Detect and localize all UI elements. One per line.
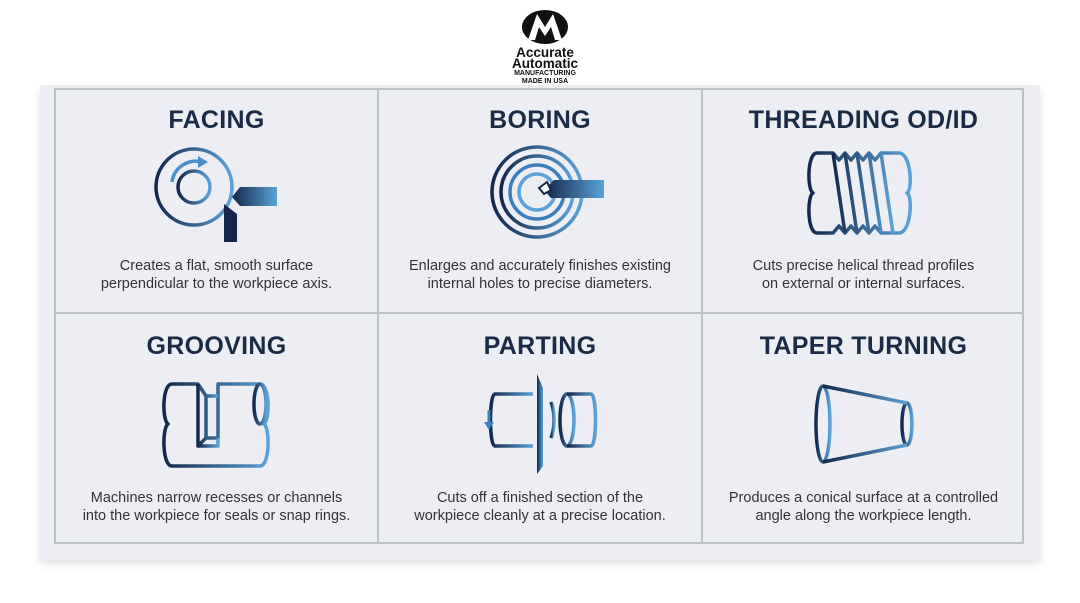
panel: boring: Enlarges and accurately finishes existing: [409, 258, 671, 274]
panel: taper turning: [729, 332, 998, 524]
panel: threading: THREADING OD/ID: [749, 106, 978, 134]
logo: MADE IN USA: [522, 78, 568, 85]
panel: parting: Cuts off a finished section of the: [437, 490, 643, 506]
panel: parting: workpiece cleanly at a precise location.: [414, 508, 666, 524]
logo: Automatic: [512, 56, 578, 71]
panel: boring: BORING: [489, 106, 591, 134]
panel: threading: Cuts precise helical thread profiles: [753, 258, 974, 274]
icon: parting: [484, 374, 598, 474]
panel: facing: Creates a flat, smooth surface: [120, 258, 313, 274]
panel: parting: PARTING: [484, 332, 596, 360]
icon: grooving: [162, 382, 270, 468]
panel: threading: on external or internal surfaces.: [762, 276, 965, 292]
panel: boring: [409, 106, 671, 292]
panel: taper turning: angle along the workpiece length.: [755, 508, 972, 524]
logo: [512, 10, 578, 85]
panel: taper turning: Produces a conical surface at a controlled: [729, 490, 998, 506]
panel: facing: FACING: [168, 106, 265, 134]
grid panel: [54, 88, 1024, 544]
panel: grooving: [83, 332, 350, 524]
logo: Accurate: [516, 45, 574, 60]
panel: grooving: Machines narrow recesses or channels: [91, 490, 342, 506]
panel: parting: [414, 332, 666, 524]
icon: boring: [490, 145, 604, 239]
icon: facing: [154, 147, 277, 242]
icon: taper: [814, 384, 914, 464]
logo: MANUFACTURING: [514, 70, 576, 77]
panel: boring: internal holes to precise diameters.: [428, 276, 652, 292]
panel: taper turning: TAPER TURNING: [760, 332, 967, 360]
panel: threading: [749, 106, 978, 292]
icon: threading: [807, 151, 912, 235]
panel: facing: [101, 106, 332, 292]
panel: grooving: GROOVING: [147, 332, 286, 360]
panel: grooving: into the workpiece for seals or snap rings.: [83, 508, 350, 524]
panel: facing: perpendicular to the workpiece axis.: [101, 276, 332, 292]
